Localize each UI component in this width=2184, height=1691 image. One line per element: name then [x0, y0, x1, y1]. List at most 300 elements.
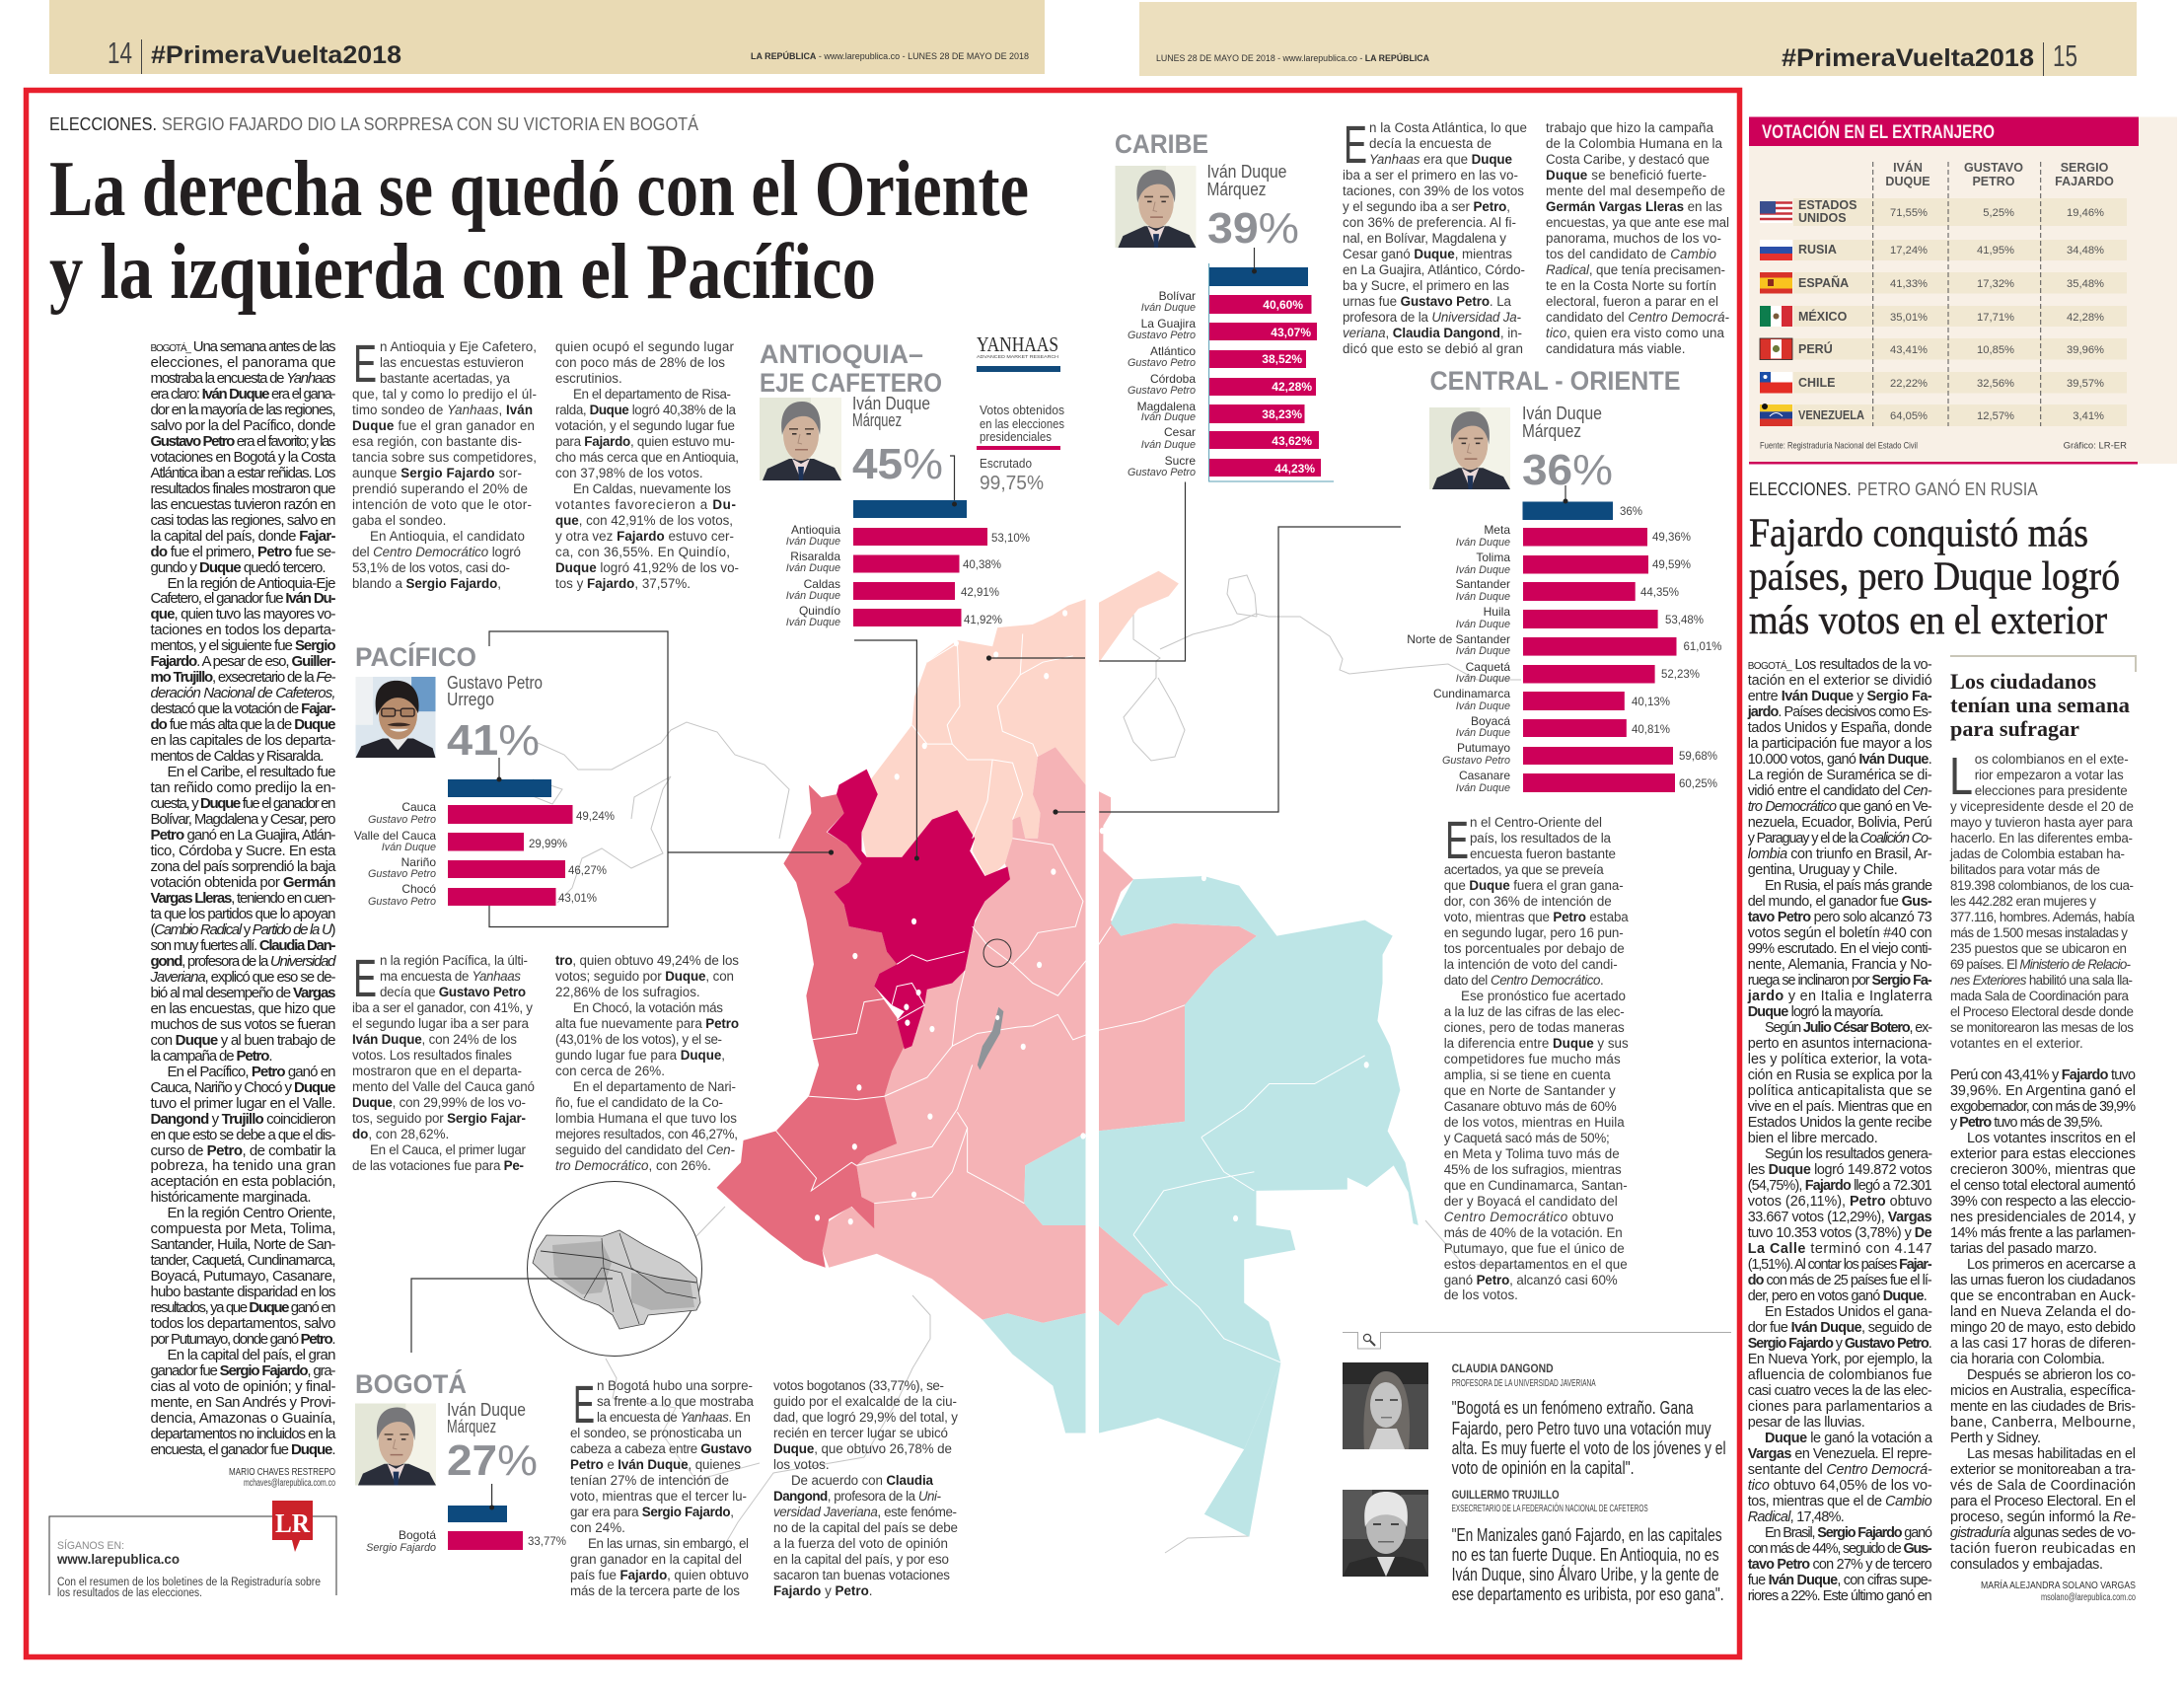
department bars: Magdalena	[1137, 400, 1196, 413]
text block: Pacífico article: En el Cauca, el primer lugar	[370, 1142, 527, 1157]
text block: Antioquia article: Duque fue el gran ganador en	[352, 418, 535, 433]
photo: Iván Duque	[355, 1404, 436, 1485]
drop cap: E	[1344, 115, 1367, 175]
department bars: Iván Duque	[786, 536, 840, 548]
row: España: 41,33%	[1890, 278, 1928, 290]
department borders	[776, 633, 1365, 1362]
text block: Centro-Oriente article: acertados, ya que se preveía	[1444, 862, 1604, 877]
text block: left column: casi todas las regiones, salvo en	[150, 512, 335, 529]
text block: second story left column: tro Democrático que ganó en Ve-	[1748, 799, 1932, 815]
text block: second story left column: ción en Rusia se explica por la	[1748, 1067, 1932, 1083]
attribution: Claudia Dangond	[1452, 1363, 1596, 1389]
column headers: DUQUE	[1885, 175, 1930, 188]
text block: Caribe article: y el segundo iba a ser Petro,	[1343, 199, 1510, 214]
department bars	[786, 523, 1030, 628]
department bars: 38,52%	[1262, 352, 1302, 366]
department bars: Tolima	[1476, 551, 1510, 564]
text block: second story left column: entre Iván Duque y Sergio Fa-	[1748, 689, 1932, 704]
text block: left column: Cauca, Nariño y Chocó y Duque	[150, 1079, 335, 1096]
text block: Pacífico article: iba a ser el ganador, con 41%, y	[352, 1000, 533, 1015]
text block: second story right column: exterior para estas elecciones	[1950, 1146, 2136, 1162]
byline: María Alejandra Solano: MARÍA ALEJANDRA SOLANO VARGAS	[1981, 1579, 2136, 1591]
text block: Caribe article second column: encuestas, ya que ante ese mal	[1546, 215, 1729, 230]
text block: Caribe article second column: mente del mal desempeño de	[1546, 184, 1725, 198]
department bars: Gustavo Petro	[368, 896, 436, 908]
text block: second story left column: tación en el exterior se dividió	[1748, 673, 1932, 689]
axis	[1209, 263, 1334, 481]
row: Rusia	[1760, 240, 2104, 260]
text block: second story left column: tico obtuvo 64,05% de los vo-	[1748, 1478, 1932, 1494]
Bogotá marker circle	[983, 939, 1011, 967]
text block: Caribe article: n la Costa Atlántica, lo que	[1369, 120, 1527, 135]
heading: PACÍFICO	[355, 641, 476, 672]
text block: second story right column: mente en las ciudades de Bris-	[1950, 1399, 2136, 1415]
candidate name: Márquez	[447, 1417, 496, 1436]
text block: left column: cias al voto de opinión; y final-	[150, 1378, 335, 1395]
row bands	[1793, 198, 2127, 426]
quote: Guillermo Trujillo: ese departamento es uribista, por eso gana".	[1452, 1583, 1724, 1604]
main title	[49, 146, 1029, 316]
text block: Pacífico article: ma encuesta de Yanhaas	[380, 969, 521, 984]
text block: left column: En la región de Antioquia-Eje	[168, 575, 335, 592]
promo box: follow us: Con el resumen de los boletines de la Registraduría sobre	[57, 1577, 321, 1588]
photo: Claudia Dangond	[1343, 1362, 1428, 1449]
text block: Centro-Oriente article: 45% de los sufragios, mientras	[1444, 1162, 1622, 1177]
text block: second story left column: Sergio Fajardo y Gustavo Petro.	[1748, 1336, 1932, 1352]
sidebar text: os colombianos en el exte-	[1975, 752, 2129, 767]
panel: voting abroad table	[1749, 116, 2177, 464]
department bars: Iván Duque	[1456, 782, 1510, 794]
text block: Bogotá article: n Bogotá hubo una sorpre-	[597, 1378, 753, 1393]
department bars: 29,99%	[529, 839, 567, 850]
Bogotá bar	[366, 1528, 566, 1554]
region: Pacífico	[717, 785, 905, 1268]
text block: left column: hubo bastante disparidad en los	[150, 1284, 335, 1300]
sidebar text: jadas de Colombia estaban ha-	[1949, 846, 2125, 861]
department bars: 59,68%	[1679, 751, 1717, 763]
department bars: Iván Duque	[786, 617, 840, 628]
text block: second story left column: Radical, 17,48%.	[1748, 1509, 1845, 1525]
department bars: 43,01%	[558, 893, 597, 905]
text block: second story right column: que se encontraban en Auck-	[1950, 1288, 2136, 1304]
text block: second story right column: exgobernador, con más de 39,9%	[1950, 1099, 2136, 1115]
text block: Antioquia article second column: ralda, Duque logró 40,38% de la	[555, 403, 737, 417]
row: Perú	[1760, 338, 2104, 359]
panel: Central-Oriente chart: 36%	[1620, 506, 1642, 518]
text block: Caribe article second column: tos del candidato de Cambio	[1546, 247, 1717, 261]
byline: Mario Chaves: mchaves@larepublica.com.co	[244, 1478, 335, 1489]
text block: second story right column: las urnas fueron los ciudadanos	[1950, 1273, 2136, 1288]
candidate name: Iván Duque	[447, 1400, 526, 1420]
department bars: 38,23%	[1262, 407, 1302, 421]
text block: Centro-Oriente article: la intención de voto del candi-	[1444, 957, 1618, 972]
text block: Bogotá article: gran ganador en la capital del	[570, 1552, 742, 1567]
department bars: Iván Duque	[1456, 673, 1510, 685]
photo: Iván Duque	[760, 398, 841, 480]
quote: Claudia Dangond: alta. Es muy fuerte el voto de los jóvenes y el	[1452, 1437, 1726, 1458]
main title: y la izquierda con el Pacífico	[49, 229, 876, 316]
text block: Bogotá article: sa frente a lo que mostraba	[597, 1394, 755, 1409]
text block: Caribe article second column: de la Colombia Humana en la	[1546, 136, 1723, 151]
department bars: Casanare	[1459, 769, 1510, 782]
sidebar text: mayo y tuvieron hasta ayer para	[1950, 815, 2134, 830]
text block: Caribe article second column	[1546, 120, 1730, 356]
text block: Centro-Oriente article: de los votos, mientras en Huila	[1444, 1115, 1625, 1130]
text block: second story right column: tación fueron reubicadas en	[1950, 1541, 2136, 1557]
attribution: Guillermo Trujillo: GUILLERMO TRUJILLO	[1452, 1490, 1560, 1502]
text block: Bogotá article second column: a la fuerza del voto de opinión	[773, 1536, 948, 1551]
text block: Centro-Oriente article: encuesta fueron bastante	[1470, 846, 1616, 861]
department bars: 40,60%	[1263, 298, 1303, 312]
text block: second story left column: Duque le ganó la votación a	[1765, 1431, 1932, 1446]
candidate name: Iván Duque	[1207, 162, 1286, 182]
photo: Iván Duque	[1115, 166, 1197, 248]
page number 15: 15	[2053, 38, 2077, 73]
text block: left column: Petro ganó en La Guajira, Atlán-	[150, 827, 335, 844]
department bars: Iván Duque	[1456, 645, 1510, 657]
text block: left column: (Cambio Radical y Partido de la U)	[150, 921, 335, 938]
sidebar text	[1949, 747, 2136, 1051]
text block: Centro-Oriente article: que Duque fuera el gran gana-	[1444, 878, 1624, 893]
text block: second story right column	[1950, 1067, 2137, 1573]
text block: second story left column: Duque logró la mayoría.	[1748, 1004, 1884, 1020]
poll bar	[1523, 501, 1613, 520]
text block: Bogotá article: voto, mientras que el tercer lu-	[570, 1489, 747, 1504]
text block: second story left column: ruega se inclinaron por Sergio Fa-	[1748, 973, 1932, 989]
department bars: Meta	[1484, 523, 1510, 537]
heading	[760, 339, 942, 398]
poll bar	[1209, 267, 1308, 286]
department bars: Iván Duque	[1141, 439, 1196, 451]
text block: second story left column: perto en asuntos internaciona-	[1748, 1036, 1932, 1052]
photo: Guillermo Trujillo	[1343, 1490, 1428, 1577]
candidate name: Iván Duque	[852, 394, 930, 413]
text block: left column: pobreza, ha tenido una gran	[150, 1157, 335, 1174]
row: México: 42,28%	[2067, 312, 2104, 324]
text block: second story right column: crecieron 300%, mientras que	[1950, 1162, 2136, 1178]
source note: Gráfico: LR-ER	[2064, 440, 2127, 452]
text block: Centro-Oriente article: más de 40% de la votación. En	[1444, 1225, 1623, 1240]
sidebar text: elecciones para presidente	[1975, 783, 2128, 798]
candidate name: Urrego	[447, 690, 494, 709]
text block: Pacífico article: el segundo lugar iba a ser para	[352, 1016, 530, 1031]
text block: second story right column: para el Proceso Electoral. En el	[1950, 1494, 2136, 1509]
candidate name	[447, 1400, 526, 1436]
kicker: SERGIO FAJARDO DIO LA SORPRESA CON SU VICTORIA EN BOGOTÁ	[162, 114, 698, 134]
text block: Bogotá article: tenían 27% de intención de	[570, 1473, 729, 1488]
row: México: 35,01%	[1890, 312, 1928, 324]
text block: Caribe article second column: Duque se benefició fuerte-	[1546, 168, 1707, 183]
candidate name	[447, 673, 543, 709]
sidebar text: más de 1.500 mesas instaladas y	[1950, 925, 2128, 940]
row: Venezuela: 3,41%	[2073, 410, 2104, 422]
table title bar	[1749, 116, 2139, 146]
text block: Antioquia article second column: Duque logró 41,92% de los vo-	[555, 560, 739, 575]
Bogotá bar: Bogotá	[399, 1528, 436, 1542]
promo box: follow us: SÍGANOS EN:	[57, 1539, 124, 1552]
main title: La derecha se quedó con el Oriente	[49, 146, 1029, 233]
text block: Caribe article second column: tico, quien era visto como una	[1546, 326, 1725, 340]
text block: Pacífico article: mostraron que en el departa-	[352, 1064, 522, 1078]
text block: Antioquia article second column: cho más cerca que en Antioquia,	[555, 450, 739, 465]
poll bar	[448, 779, 551, 797]
row: Perú: PERÚ	[1798, 341, 1833, 356]
text block: second story left column: con más de 44%, seguido de Gus-	[1748, 1541, 1932, 1557]
text block: Centro-Oriente article: que en Norte de Santander y	[1444, 1083, 1616, 1098]
department bars: 40,81%	[1632, 724, 1670, 736]
row: Venezuela: VENEZUELA	[1798, 408, 1864, 422]
text block: left column: era claro: Iván Duque era el gana-	[150, 386, 335, 403]
department bars: 43,62%	[1272, 434, 1312, 448]
header bar: page 14	[49, 0, 1045, 74]
text block: left column: departamentos no incluidos en la	[150, 1426, 336, 1442]
sidebar text: el Proceso Electoral desde donde	[1950, 1004, 2134, 1019]
text block: second story right column: Los primeros en acercarse a	[1967, 1257, 2136, 1273]
sidebar heading: Los ciudadanos	[1950, 669, 2096, 694]
leader to map	[988, 481, 1186, 661]
text block: Antioquia article second column: En Caldas, nuevamente los	[573, 481, 731, 496]
panel: Antioquia-Eje Cafetero chart	[760, 339, 1030, 860]
row: Venezuela	[1760, 404, 2104, 426]
text block: Centro-Oriente article: voto, mientras que Petro estaba	[1444, 910, 1629, 924]
row: Rusia: RUSIA	[1798, 243, 1837, 257]
text block: second story left column: y Paraguay y el de la Coalición Co-	[1748, 831, 1932, 846]
text block: left column: mostraba la encuesta de Yanhaas	[150, 370, 336, 387]
text block: Antioquia article second column: ca, con 36,55%. En Quindío,	[555, 545, 730, 559]
department bars: Gustavo Petro	[1128, 357, 1196, 369]
department bars: 40,13%	[1632, 697, 1670, 708]
text block: Antioquia article: que, tal y como lo predijo el úl-	[352, 387, 537, 402]
text block: second story left column: les Duque logró 149.872 votos	[1748, 1162, 1932, 1178]
sidebar heading	[1950, 669, 2130, 741]
neighbouring country outlines	[528, 575, 1570, 1553]
text block: second story left column: les y política exterior, la vota-	[1748, 1052, 1932, 1067]
text block: left column: la campaña de Petro.	[150, 1048, 272, 1065]
text block: Centro-Oriente article: ganó Petro, alcanzó casi 60%	[1444, 1273, 1618, 1287]
text block: second story left column: tuvo 10.353 votos (3,78%) y De	[1748, 1225, 1932, 1241]
panel: Caribe chart	[986, 129, 1334, 661]
poll percentage: 36%	[1522, 446, 1613, 494]
inset: Bogotá localities	[527, 1182, 702, 1356]
text block: second story right column: Los votantes inscritos en el	[1967, 1131, 2136, 1146]
row: Chile: 32,56%	[1977, 378, 2014, 390]
quote: Guillermo Trujillo: no es tan fuerte Duque. En Antioquia, no es	[1452, 1544, 1719, 1565]
text block: left column: muchos de sus votos se fueran	[150, 1016, 335, 1033]
heading: BOGOTÁ	[355, 1368, 467, 1399]
sidebar text: mada Sala de Coordinación para	[1950, 989, 2130, 1003]
text block: second story left column: do con más de 25 países fue el lí-	[1748, 1273, 1932, 1288]
drop cap: E	[573, 1375, 595, 1434]
legend note: votes and counted	[977, 404, 1064, 494]
text block: second story left column: bien el libre mercado.	[1748, 1131, 1878, 1146]
text block: Pacífico article second column: En el departamento de Nari-	[573, 1079, 736, 1094]
column headers: GUSTAVO	[1964, 161, 2023, 175]
region: Antioquia-Eje Cafetero	[828, 770, 1010, 1049]
text block: Centro-Oriente article: estos departamentos en el que	[1444, 1257, 1628, 1272]
department bars: Iván Duque	[1456, 619, 1510, 630]
text block: Antioquia article: tancia sobre sus competidores,	[352, 450, 537, 465]
legend note: votes and counted: en las elecciones	[980, 417, 1064, 431]
text block: second story left column: fue Iván Duque, con cifras supe-	[1748, 1573, 1932, 1588]
text block: Antioquia article: blando a Sergio Fajardo,	[352, 576, 501, 591]
text block: Caribe article: profesora de la Universidad Ja-	[1343, 310, 1522, 325]
text block: left column	[150, 338, 336, 1458]
text block: second story left column: (1,51%). Al contar los países Fajar-	[1748, 1257, 1932, 1273]
text block: Caribe article: Yanhaas era que Duque	[1369, 152, 1512, 167]
region: Orinoquía y Amazonía	[983, 876, 1419, 1535]
row: España: ESPAÑA	[1798, 275, 1849, 290]
text block: Caribe article second column: Germán Vargas Lleras en las	[1546, 199, 1722, 214]
text block: Antioquia article: 53,1% de los votos, casi do-	[352, 560, 510, 575]
text block: left column: votación obtenida por Germán	[150, 874, 335, 891]
header bar: page 15	[1139, 2, 2137, 76]
text block: Antioquia article: esa región, con bastante dis-	[352, 434, 522, 449]
text block: left column: las encuestas tuvieron razón en	[150, 496, 335, 513]
text block: Pacífico article: votos. Los resultados finales	[352, 1048, 512, 1063]
text block: Bogotá article second column: guido por el exalcalde de la ciu-	[773, 1394, 957, 1409]
text block: second story right column: land en Nueva Zelanda el do-	[1950, 1304, 2136, 1320]
department bars: Cundinamarca	[1433, 687, 1510, 700]
kicker: second story: ELECCIONES.	[1749, 479, 1852, 499]
text block: left column: destacó que la votación de Fajar-	[150, 700, 335, 717]
leader from inset	[411, 1279, 613, 1353]
source note	[1760, 440, 2127, 452]
department bars: Nariño	[401, 855, 436, 869]
department bars: Norte de Santander	[1407, 632, 1510, 646]
text block: second story left column: La región de Suramérica se di-	[1748, 768, 1932, 783]
text block: left column: taciones en todos los departa-	[150, 622, 335, 638]
row: Estados Unidos: ESTADOS	[1798, 198, 1856, 212]
department bars: Bolívar	[1159, 289, 1196, 303]
text block: Bogotá article: gar era para Sergio Fajardo,	[570, 1505, 734, 1519]
text block: Bogotá article	[570, 1375, 755, 1598]
department bars: Iván Duque	[1456, 700, 1510, 712]
sidebar text: se monitorearon las mesas de los	[1950, 1020, 2134, 1035]
text block: Bogotá article second column: los votos.	[773, 1457, 830, 1472]
text block: second story left column: BOGOTÁ_ Los resultados de la vo-	[1748, 657, 1932, 673]
candidate name: Gustavo Petro	[447, 673, 543, 693]
heading: ANTIOQUIA–	[760, 339, 923, 369]
text block: left column: Javeriana, explicó que eso se de-	[150, 969, 335, 986]
department bars: Cesar	[1164, 425, 1196, 439]
text block: Antioquia article: del Centro Democrático logró	[352, 545, 521, 559]
department bars: Gustavo Petro	[1128, 385, 1196, 397]
quote: Claudia Dangond: voto de opinión en la capital".	[1452, 1457, 1635, 1478]
sidebar: Los ciudadanos	[1949, 656, 2136, 1051]
text block: left column: En la región Centro Oriente,	[168, 1205, 335, 1221]
text block: second story left column: tados Unidos y España, donde	[1748, 720, 1932, 736]
text block: Antioquia article second column: tos y Fajardo, 37,57%.	[555, 576, 691, 591]
photo: Iván Duque	[1429, 407, 1510, 489]
text block: second story right column: vés de Sala de Coordinación	[1950, 1478, 2136, 1494]
byline: Mario Chaves	[229, 1466, 335, 1489]
lake	[978, 1007, 1003, 1069]
row: España	[1760, 272, 2104, 294]
text block: second story right column: a las casi 17 horas de diferen-	[1950, 1336, 2136, 1352]
column headers: PETRO	[1972, 175, 2015, 188]
text block: Antioquia article: gaba el sondeo.	[352, 513, 446, 528]
text block: second story right column: bane, Canberra, Melbourne,	[1950, 1415, 2136, 1431]
text block: second story right column: 39% con respecto a las eleccio-	[1950, 1194, 2136, 1210]
text block: Centro-Oriente article: la diferencia entre Duque y sus	[1444, 1036, 1629, 1051]
text block: Bogotá article: más de la tercera parte de los	[570, 1583, 740, 1598]
text block: left column: compuesta por Meta, Tolima,	[150, 1220, 335, 1237]
text block: Pacífico article: n la región Pacífica, la últi-	[380, 953, 528, 968]
department bars: Risaralda	[790, 550, 840, 563]
text block: Antioquia article second column: que, con 42,91% de los votos,	[555, 513, 733, 528]
legend note: votes and counted: 99,75%	[980, 473, 1044, 494]
text block: Pacífico article second column: lombia Humana el que tuvo los	[555, 1111, 737, 1126]
text block: Caribe article: iba a ser el primero en las vo-	[1343, 168, 1518, 183]
department bars: Iván Duque	[1141, 302, 1196, 314]
kicker: second story	[1749, 478, 2038, 499]
kicker: second story: PETRO GANÓ EN RUSIA	[1857, 478, 2038, 499]
text block: Pacífico article second column: 22,86% de los sufragios.	[555, 985, 700, 999]
text block: Antioquia article second column: y otra vez Fajardo estuvo cer-	[555, 529, 734, 544]
text block: second story left column: Estados Unidos la gente recibe	[1748, 1115, 1932, 1131]
row: Estados Unidos: 19,46%	[2067, 207, 2104, 219]
text block: second story right column: 39,96%. En Argentina ganó el	[1950, 1083, 2136, 1099]
department bars: Caquetá	[1466, 660, 1510, 674]
text block: Pacífico article second column: mejores resultados, con 46,27%,	[555, 1127, 738, 1141]
text block: left column: mentos de Caldas y Risaralda.	[150, 748, 324, 765]
text block: second story right column: consulados y embajadas.	[1950, 1557, 2103, 1573]
text block: Caribe article: decía la encuesta de	[1369, 136, 1492, 151]
row: Chile: CHILE	[1798, 376, 1835, 390]
panel: Central-Oriente chart	[1053, 366, 1722, 815]
text block: Centro-Oriente article: ciones, pero de todas maneras	[1444, 1020, 1625, 1035]
sidebar text: votantes en el exterior.	[1950, 1036, 2083, 1051]
text block: Centro-Oriente article: de los votos.	[1444, 1287, 1518, 1302]
text block: Caribe article: dicó que esto se debió al gran	[1343, 341, 1523, 356]
text block: second story left column: En Rusia, el país más grande	[1765, 878, 1932, 894]
drop cap: E	[353, 949, 377, 1008]
quote: Guillermo Trujillo	[1452, 1524, 1724, 1604]
column separators	[1873, 162, 2041, 426]
text block: second story left column: jardo. Países decisivos como Es-	[1747, 704, 1932, 720]
text block: second story left column: vidió entre el candidato del Cen-	[1748, 783, 1932, 799]
text block: Bogotá article second column: sacaron tan buenas votaciones	[773, 1568, 950, 1582]
text block: Pacífico article: do, con 28,62%.	[352, 1127, 449, 1141]
text block: Antioquia article second column: quien ocupó el segundo lugar	[555, 339, 735, 354]
text block: Antioquia article: aunque Sergio Fajardo sor-	[352, 466, 522, 480]
quote: Claudia Dangond	[1452, 1397, 1726, 1478]
text block: Centro-Oriente article	[1444, 811, 1629, 1302]
candidate name	[852, 394, 930, 430]
sidebar heading: tenían una semana	[1950, 693, 2130, 717]
text block: Caribe article: en La Guajira, Atlántico, Córdo-	[1343, 262, 1525, 277]
row: Venezuela: 12,57%	[1977, 410, 2014, 422]
text block: Caribe article second column: candidato del Centro Democrá-	[1546, 310, 1730, 325]
text block: second story left column: 99% escrutado. En el viejo conti-	[1748, 941, 1932, 957]
text block: Bogotá article: el sondeo, se pronosticaba un	[570, 1426, 742, 1440]
leader frame	[489, 631, 831, 927]
drop cap: E	[353, 334, 377, 394]
connector	[491, 1484, 493, 1509]
text block: second story right column: micios en Australia, específica-	[1950, 1383, 2136, 1399]
Bogotá bar: 33,77%	[528, 1536, 566, 1548]
text block: Caribe article: ba y Sucre, el primero en las	[1343, 278, 1509, 293]
text block: second story right column: Perth y Sidney.	[1950, 1431, 2041, 1446]
text block: Pacífico article second column: tro Democrático, con 26%.	[555, 1158, 711, 1173]
text block: left column: Gustavo Petro era el favorito; y las	[150, 433, 335, 450]
department bars: 49,59%	[1652, 559, 1691, 571]
department bars: Santander	[1456, 577, 1510, 591]
department bars: Quindío	[799, 604, 840, 618]
candidate name: Márquez	[1522, 421, 1581, 441]
column headers: IVÁN	[1893, 160, 1923, 175]
text block: second story right column: Las mesas habilitadas en el	[1967, 1446, 2136, 1462]
